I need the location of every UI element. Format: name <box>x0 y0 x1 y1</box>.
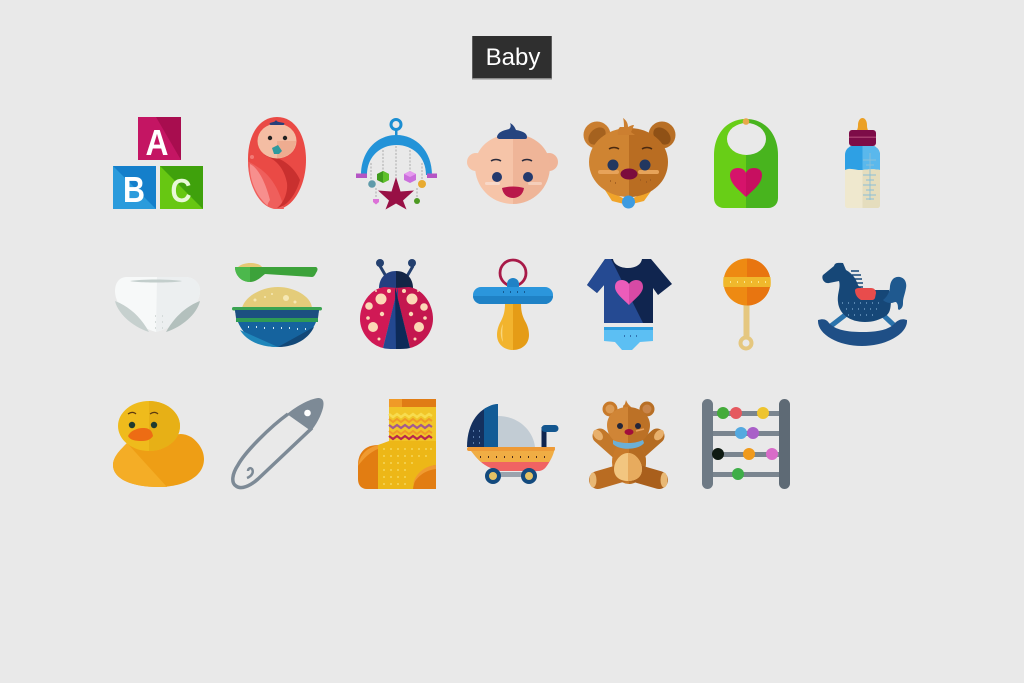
icon: green bib <box>714 118 778 208</box>
icon: baby stroller <box>467 404 558 482</box>
icon: swaddled baby <box>248 117 306 209</box>
title <box>472 36 552 80</box>
icon: diaper <box>115 277 200 332</box>
icon: ladybug <box>360 259 433 349</box>
icon: bear head <box>584 118 676 208</box>
icon: alphabet blocks <box>113 117 203 210</box>
icon: pacifier <box>473 260 553 350</box>
icon: baby face <box>467 123 558 204</box>
icon: abacus <box>702 399 790 489</box>
icon: teddy bear <box>590 400 668 488</box>
icon: alphabet blocks: A <box>146 122 168 163</box>
icon: alphabet blocks: C <box>170 172 192 209</box>
icon: rubber duck <box>113 401 204 487</box>
icon: safety pin <box>233 398 323 488</box>
icon: rocking horse <box>818 263 907 346</box>
icon: baby sock <box>358 399 436 489</box>
icon: alphabet blocks: B <box>123 169 145 210</box>
icon: baby onesie <box>587 259 672 350</box>
icon: food bowl and spoon <box>232 263 322 347</box>
icon: baby crib mobile <box>356 120 437 210</box>
title: Baby <box>486 44 540 71</box>
icon: baby bottle <box>845 118 880 208</box>
icon: rattle <box>723 258 771 348</box>
